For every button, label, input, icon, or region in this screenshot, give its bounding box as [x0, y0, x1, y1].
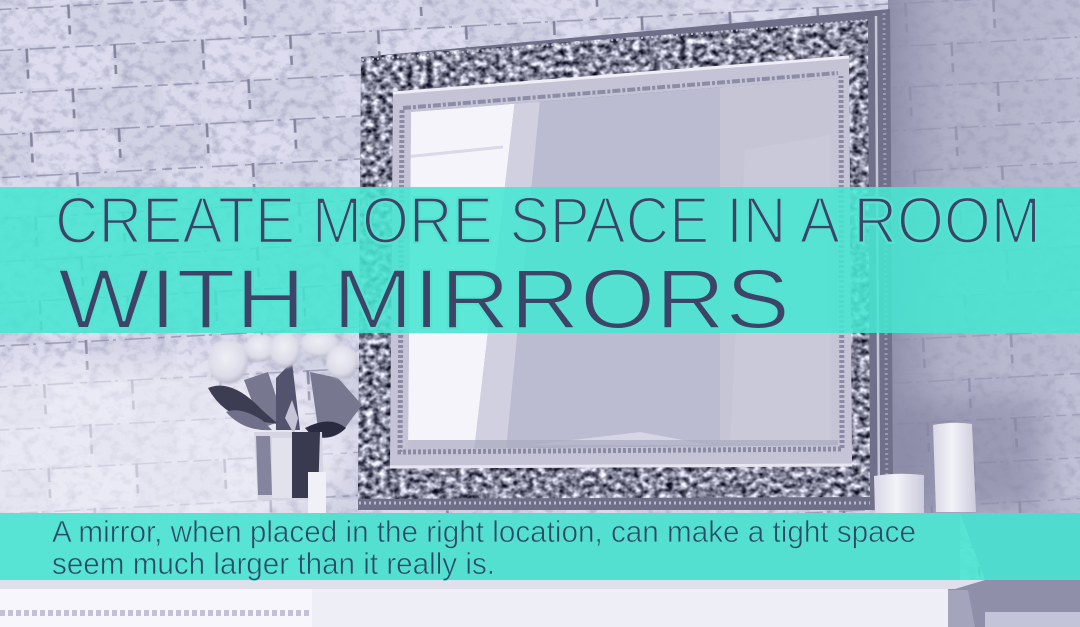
- tall candle: [933, 423, 976, 512]
- bottom teal banner: [0, 513, 1080, 580]
- beaded top edge: [362, 20, 868, 60]
- description: [52, 514, 916, 581]
- title: [55, 183, 1041, 346]
- description line 1: A mirror, when placed in the right location, can make a tight space: [52, 514, 916, 549]
- vase of roses: [208, 331, 362, 514]
- fireplace mantel: [0, 513, 1080, 627]
- rose blooms: [208, 331, 358, 384]
- candles: [874, 423, 976, 514]
- ornate carved band: [350, 10, 880, 510]
- right wall shading: [888, 0, 1080, 515]
- carved trim: [0, 610, 312, 616]
- mirror glass reflection: [408, 78, 838, 449]
- bottom bead edge: [359, 502, 870, 504]
- mirror: [350, 9, 893, 510]
- title line 2: WITH MIRRORS: [58, 252, 790, 346]
- dark foliage: [208, 362, 362, 438]
- top teal banner: [0, 187, 1080, 333]
- inner moulding: [390, 57, 852, 467]
- glass vase: [254, 432, 324, 500]
- short candle: [874, 474, 924, 514]
- frame outer strip: [358, 9, 893, 510]
- frame right edge: [868, 9, 893, 510]
- description line 2: seem much larger than it really is.: [52, 546, 495, 581]
